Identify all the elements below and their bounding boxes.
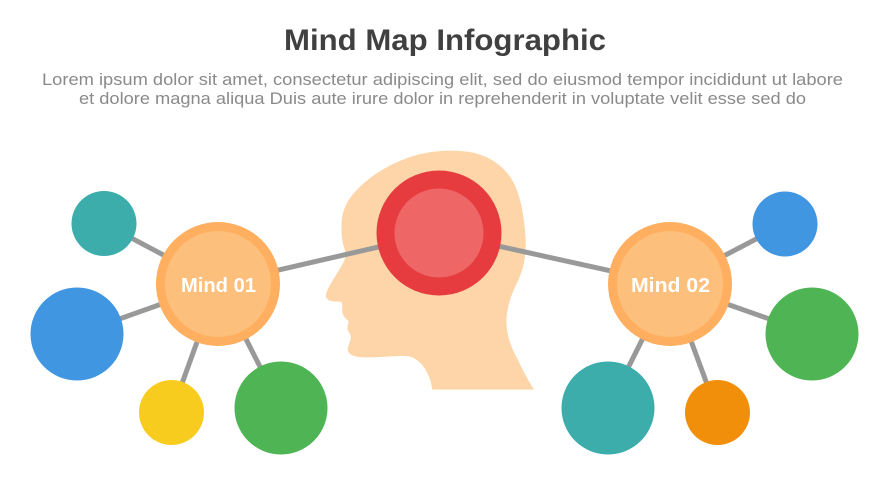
- subtitle text block: [42, 71, 843, 108]
- satellite: orange small right: [685, 380, 750, 445]
- satellite: teal large right: [562, 362, 654, 454]
- central brain node: [376, 170, 502, 296]
- satellite: blue large left: [30, 288, 124, 380]
- satellite: yellow small left: [139, 380, 204, 445]
- icon: head silhouette: [326, 151, 534, 390]
- title: Mind Map Infographic: [284, 24, 606, 57]
- subtitle text block: et dolore magna aliqua Duis aute irure dolor in reprehenderit in voluptate velit esse sed do: [79, 90, 806, 108]
- node: Mind 02: [608, 222, 732, 346]
- satellite: green large right: [766, 288, 858, 380]
- satellite: green large left: [234, 362, 328, 454]
- connector lines: [77, 224, 812, 412]
- node: Mind 01: [156, 222, 280, 346]
- node: Mind 02: Mind 02: [631, 275, 710, 297]
- subtitle text block: Lorem ipsum dolor sit amet, consectetur adipiscing elit, sed do eiusmod tempor incididunt ut labore: [42, 71, 843, 89]
- node: Mind 01: Mind 01: [181, 275, 256, 297]
- satellite: blue small right: [752, 192, 818, 256]
- satellite: teal small left: [72, 191, 136, 256]
